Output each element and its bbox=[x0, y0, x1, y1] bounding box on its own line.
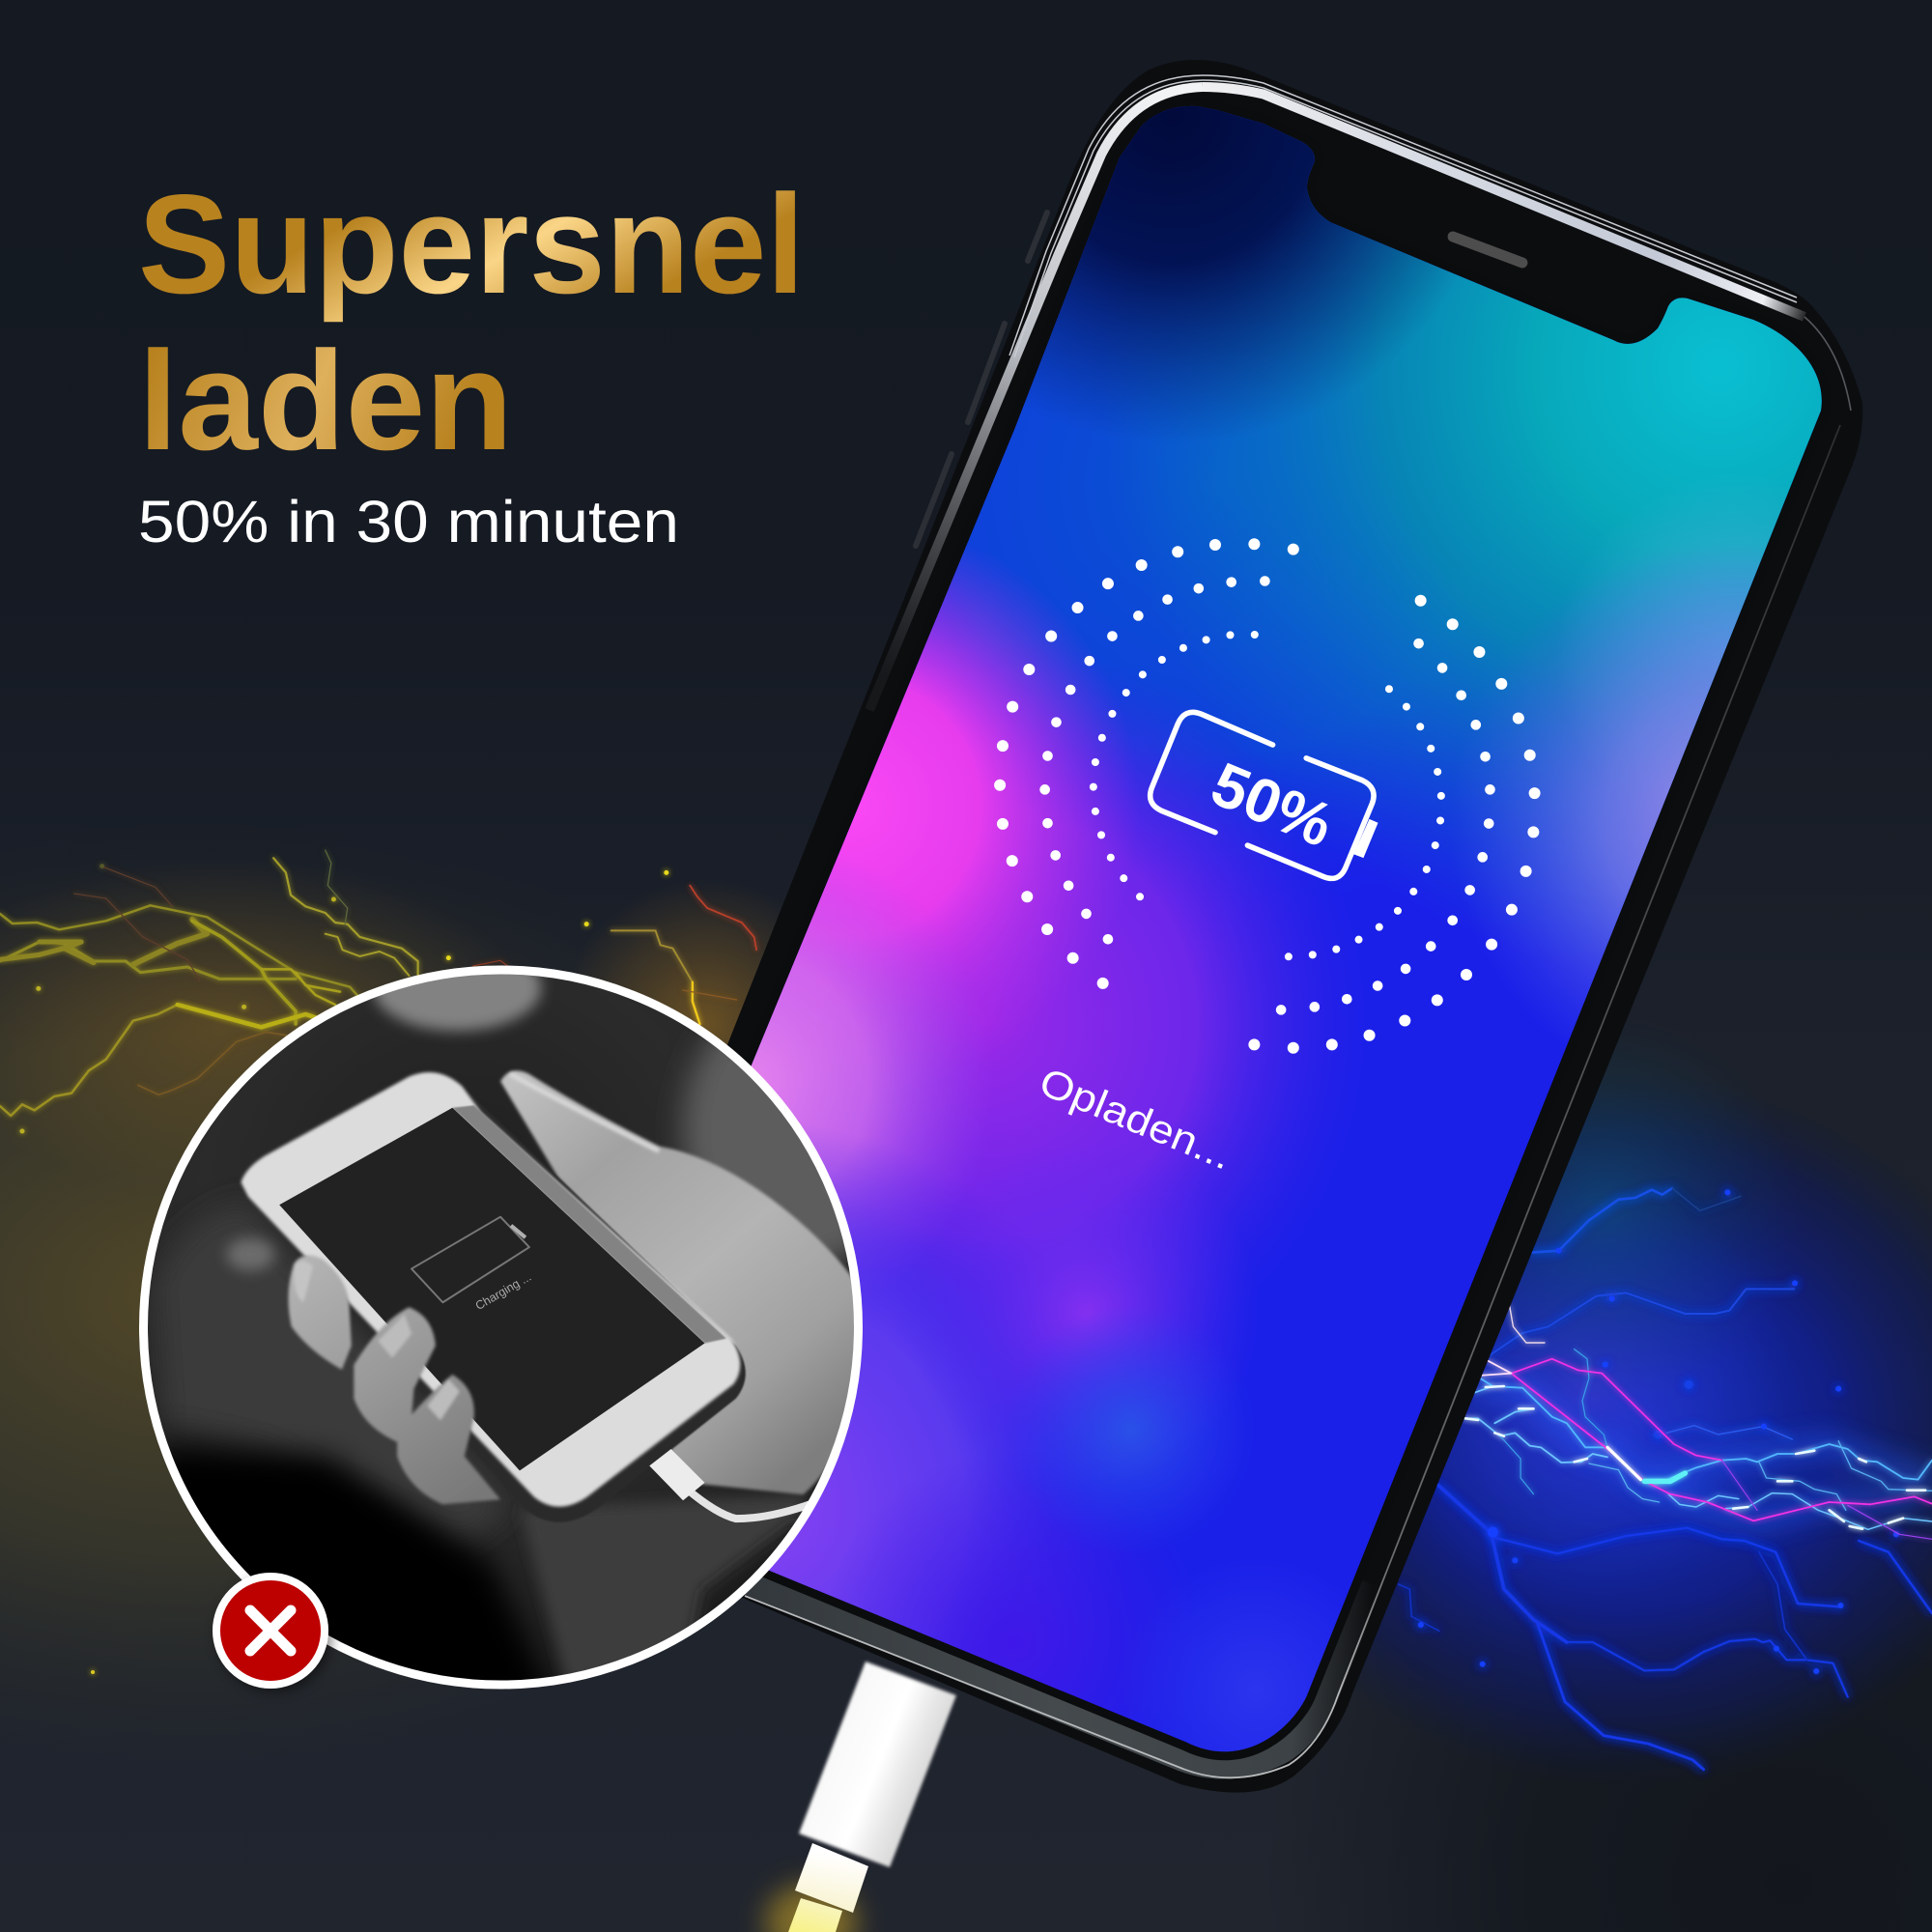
photo: cable bbox=[688, 1490, 812, 1519]
phone frame highlight bbox=[745, 1596, 1338, 1777]
photo bbox=[148, 974, 854, 1681]
title line 2: laden bbox=[138, 322, 513, 479]
photo: battery outline bbox=[412, 1217, 529, 1302]
charging label: Opladen... bbox=[1034, 1059, 1238, 1179]
photo: thumb highlight bbox=[510, 1074, 659, 1151]
photo: fingers bbox=[288, 1255, 500, 1504]
photo: phone side edge bbox=[452, 1105, 726, 1344]
phone body bbox=[570, 60, 1862, 1793]
bright lightning strands bbox=[1463, 1306, 1932, 1539]
photo: palm bbox=[500, 1070, 861, 1494]
progress dot rings bbox=[1000, 544, 1535, 1048]
charging cable bbox=[765, 1662, 956, 1932]
title bbox=[138, 165, 805, 479]
fine edge lines bbox=[1009, 75, 1797, 357]
blue lightning right bbox=[1399, 1188, 1932, 1770]
phone lower frame bbox=[715, 1570, 1372, 1768]
corner edge line bbox=[1804, 317, 1851, 411]
yellow lightning left bbox=[0, 850, 756, 1672]
photo inset: standard charging bbox=[139, 966, 863, 1689]
outer dots bbox=[1000, 544, 1535, 1048]
title line 1: Supersnel bbox=[138, 165, 805, 323]
cable cord bbox=[788, 1898, 842, 1932]
reject badge bbox=[216, 1577, 325, 1685]
photo: phone screen bbox=[279, 1108, 704, 1470]
silver edge left bbox=[869, 87, 1203, 710]
silver edge top bbox=[1203, 87, 1804, 317]
badge disc bbox=[216, 1577, 325, 1685]
photo: connector bbox=[649, 1449, 704, 1500]
middle dots bbox=[1045, 582, 1490, 1009]
blue energy glow bbox=[1208, 1014, 1932, 1932]
badge cross bbox=[250, 1610, 291, 1651]
photo: battery cap bbox=[511, 1226, 526, 1237]
screen border bbox=[580, 106, 1822, 1751]
battery icon bbox=[1151, 712, 1378, 878]
smartphone bbox=[726, 60, 1862, 1793]
photo: phone case bbox=[489, 1114, 747, 1522]
lightning core glow bbox=[1480, 1384, 1932, 1520]
cable glow bbox=[765, 1884, 858, 1932]
yellow energy glow bbox=[0, 821, 889, 1768]
screen wallpaper bbox=[752, 106, 1822, 1752]
inner dots bbox=[1094, 635, 1441, 956]
photo: phone body bbox=[241, 1072, 740, 1507]
photo white ring bbox=[143, 970, 858, 1685]
subtitle: 50% in 30 minuten bbox=[138, 489, 679, 554]
cable connector bbox=[799, 1662, 956, 1867]
right edge line bbox=[1338, 425, 1840, 1695]
phone side buttons bbox=[916, 213, 1047, 546]
photo: charging text: Charging ... bbox=[473, 1270, 533, 1313]
earpiece speaker bbox=[1453, 237, 1522, 263]
battery percentage: 50% bbox=[1202, 749, 1343, 861]
cable strain relief bbox=[795, 1843, 868, 1913]
